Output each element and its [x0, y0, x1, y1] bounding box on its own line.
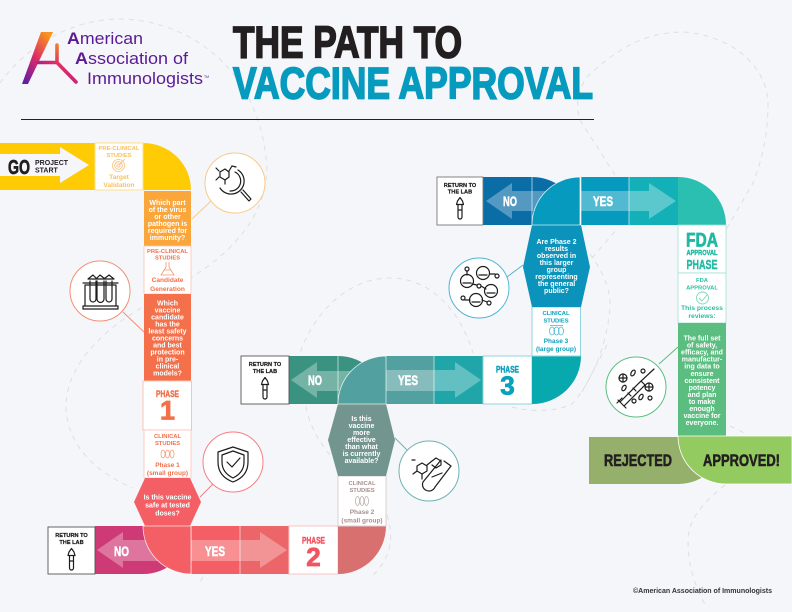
- panel: phase 2: PHASE: [302, 536, 325, 546]
- hexagon: general public question: the general: [538, 281, 575, 288]
- panel: candidate generation: STUDIES: [155, 256, 180, 262]
- panel: candidate generation: PRE-CLINICAL: [147, 249, 188, 255]
- hexagon: effective question: effective: [347, 437, 376, 444]
- panel: clinical phase 1: CLINICAL: [154, 434, 181, 440]
- icon: vial: [68, 548, 75, 570]
- arrow: no 1: [97, 532, 170, 568]
- panel: fda approval phase: [678, 225, 726, 273]
- arrow: yes 3: [581, 183, 676, 219]
- target validation box: STUDIES: [106, 153, 132, 159]
- hexagon: general public question: this larger: [540, 260, 574, 267]
- curve: corner 3: [338, 356, 386, 404]
- return to lab 1: THE LAB: [59, 540, 84, 546]
- curve: corner 4: [532, 356, 581, 404]
- panel: pathogen question: or other: [154, 214, 181, 221]
- panel: safety question: vaccine: [155, 308, 180, 314]
- panel: safety question: protection: [150, 350, 185, 356]
- target validation box: [95, 143, 143, 190]
- panel: rejected: REJECTED: [604, 451, 672, 470]
- panel: pathogen question: of the virus: [149, 207, 186, 214]
- icon: vial: [262, 378, 268, 399]
- panel: fda approval review: reviews:: [688, 313, 716, 320]
- no label: NO: [308, 373, 322, 388]
- icon: vial: [456, 198, 464, 219]
- panel: review details: of safety,: [687, 342, 717, 350]
- title line 1: THE PATH TO: [233, 18, 462, 68]
- panel: phase 1: 1: [160, 396, 175, 426]
- icon circle: shield: [203, 432, 263, 492]
- panel: fda approval review: [678, 273, 726, 323]
- panel: phase 1: [143, 381, 192, 430]
- hexagon: effective question: Is this: [351, 416, 372, 423]
- panel: pathogen question: [144, 191, 191, 246]
- return to lab 2: RETURN TO: [249, 362, 282, 368]
- panel: clinical phase 1: [144, 430, 191, 478]
- yes label: YES: [593, 194, 613, 209]
- panel: review details: efficacy, and: [681, 350, 723, 357]
- return to lab 3: RETURN TO: [444, 183, 477, 189]
- hexagon: general public question: observed in: [537, 253, 576, 260]
- hexagon: effective question: [328, 404, 395, 476]
- curve: corner 1: [143, 526, 191, 574]
- panel: safety question: models?: [153, 370, 182, 378]
- curve: fda corner: [678, 177, 726, 225]
- panel: clinical phase 2: [338, 476, 386, 526]
- panel: band 3 no: [483, 177, 580, 225]
- panel: candidate generation: Candidate: [152, 277, 184, 284]
- go label: GO: [8, 157, 30, 179]
- panel: safety question: has the: [155, 322, 180, 328]
- panel: safety question: clinical: [156, 364, 179, 370]
- panel: safety question: least safety: [148, 328, 187, 336]
- panel: clinical phase 1: Phase 1: [155, 462, 180, 469]
- panel: review details: consistent: [684, 378, 720, 385]
- icon circle: magnifier: [205, 153, 265, 213]
- panel: pathogen question: pathogen is: [148, 221, 187, 228]
- hexagon: general public question: representing: [535, 274, 578, 281]
- go arrow: [0, 147, 89, 183]
- panel: approved: [678, 436, 792, 484]
- panel: go band: [0, 143, 191, 190]
- panel: phase 3: 3: [500, 370, 515, 400]
- logo: [22, 30, 209, 88]
- icon circle: test tube rack: [70, 261, 130, 321]
- panel: pathogen question: Which part: [149, 200, 186, 207]
- panel: clinical phase 3: [532, 307, 580, 356]
- logo text: Association of: [75, 50, 188, 68]
- title: [233, 18, 593, 108]
- panel: fda approval review: FDA: [696, 278, 709, 284]
- panel: safety question: Which: [157, 300, 178, 308]
- no label: NO: [503, 194, 517, 209]
- panel: fda approval phase: APPROVAL: [686, 248, 718, 257]
- hexagon: general public question: Are Phase 2: [536, 239, 577, 246]
- hexagon: safe question: Is this vaccine: [144, 494, 192, 502]
- panel: band 1 no: [95, 526, 191, 574]
- panel: fda approval review: APPROVAL: [686, 286, 718, 292]
- panel: review details: [678, 323, 726, 436]
- panel: pathogen question: required for: [148, 228, 187, 235]
- logo text: [67, 30, 209, 88]
- arrow: yes 1: [191, 532, 287, 568]
- panel: phase 1: PHASE: [156, 389, 179, 399]
- panel: safety question: and best: [153, 342, 183, 350]
- hexagon: general public question: public?: [544, 288, 569, 295]
- panel: review details: to make: [689, 399, 715, 406]
- hexagon: effective question: more: [353, 430, 370, 437]
- icon: check badge: [696, 292, 708, 304]
- return to lab 2: [241, 356, 289, 404]
- panel: fda approval review: This process: [681, 305, 723, 312]
- panel: band 2 yes: [386, 356, 483, 404]
- panel: review details: The full set: [684, 336, 721, 342]
- return to lab 1: RETURN TO: [55, 533, 88, 539]
- icon circle: connected people: [449, 258, 509, 318]
- target validation box: PRE-CLINICAL: [99, 146, 140, 152]
- panel: clinical phase 2: CLINICAL: [348, 481, 376, 487]
- icon circle: molecule and test tube: [399, 441, 459, 501]
- curve: corner 5: [532, 177, 580, 225]
- yes label: YES: [398, 373, 418, 388]
- panel: review details: potency: [689, 385, 716, 392]
- project start: PROJECT: [35, 160, 69, 167]
- panel: pathogen question: immunity?: [150, 235, 185, 242]
- hexagon: effective question: vaccine: [349, 423, 374, 430]
- panel: safety question: [144, 294, 191, 381]
- panel: clinical phase 1: (small group): [147, 470, 188, 477]
- hexagon: safe question: safe at tested: [145, 502, 190, 510]
- yes label: YES: [205, 544, 225, 559]
- icon: target: [112, 159, 125, 172]
- no label: NO: [114, 544, 129, 559]
- panel: band 2 no: [289, 356, 386, 404]
- title line 2: VACCINE APPROVAL: [233, 60, 593, 108]
- logo text: Immunologists: [87, 70, 203, 88]
- target validation box: Target: [109, 174, 130, 181]
- arrow: no 3: [486, 183, 560, 219]
- panel: phase 2: [289, 526, 338, 574]
- hexagon: safe question: [134, 478, 201, 526]
- hexagon: general public question: group: [547, 267, 566, 274]
- panel: clinical phase 3: (large group): [536, 346, 576, 353]
- icon: people: [161, 450, 174, 458]
- copyright: ©American Association of Immunologists: [633, 587, 772, 595]
- panel: clinical phase 2: (small group): [341, 518, 383, 524]
- icon: people: [356, 496, 368, 506]
- panel: safety question: in pre-: [157, 356, 179, 364]
- panel: fda approval phase: FDA: [686, 230, 718, 252]
- project start: START: [35, 168, 59, 174]
- panel: clinical phase 3: Phase 3: [544, 338, 569, 345]
- hexagon: general public question: [523, 225, 590, 307]
- connector lines: [123, 201, 678, 497]
- hexagon: effective question: available?: [345, 458, 378, 465]
- panel: clinical phase 3: CLINICAL: [542, 311, 570, 317]
- panel: clinical phase 1: STUDIES: [155, 441, 180, 447]
- arrow: no 2: [291, 362, 365, 398]
- panel: safety question: candidate: [151, 314, 184, 322]
- hexagon: effective question: is currently: [343, 451, 380, 458]
- panel: phase 2: 2: [306, 542, 321, 572]
- arrow: yes 2: [386, 362, 481, 398]
- panel: review details: enough: [689, 406, 715, 413]
- panel: review details: manufactur-: [682, 357, 723, 364]
- panel: safety question: concerns: [152, 336, 183, 342]
- hexagon: safe question: doses?: [155, 510, 180, 518]
- panel: band 1 yes: [191, 526, 289, 574]
- return to lab 1: [48, 527, 95, 574]
- panel: rejected: [589, 437, 726, 484]
- hexagon: general public question: results: [545, 246, 568, 253]
- panel: review details: ensure: [691, 371, 714, 378]
- panel: review details: ing data to: [684, 364, 720, 371]
- hexagon: effective question: than what: [345, 444, 378, 451]
- return to lab 2: THE LAB: [253, 369, 277, 375]
- icon: flask: [161, 262, 174, 275]
- target validation box: Validation: [103, 182, 135, 189]
- curve: corner 2: [338, 526, 386, 574]
- panel: band 3 yes: [581, 177, 678, 225]
- panel: clinical phase 3: STUDIES: [543, 318, 569, 324]
- logo text: American: [67, 30, 143, 48]
- return to lab 3: [437, 177, 483, 225]
- panel: review details: vaccine for: [684, 413, 721, 420]
- icon: people: [550, 326, 564, 335]
- logo mark: [22, 32, 76, 84]
- panel: review details: everyone.: [686, 420, 718, 427]
- icon circle: syringe and viruses: [606, 357, 666, 417]
- panel: clinical phase 2: STUDIES: [349, 488, 375, 494]
- panel: phase 3: PHASE: [496, 364, 519, 374]
- panel: phase 3: [483, 356, 532, 404]
- return to lab 3: THE LAB: [448, 190, 472, 196]
- panel: review details: and plan: [688, 392, 716, 399]
- panel: candidate generation: Generation: [150, 286, 185, 293]
- panel: fda approval phase: PHASE: [686, 258, 718, 272]
- panel: candidate generation: [144, 246, 191, 294]
- panel: clinical phase 2: Phase 2: [350, 509, 375, 516]
- logo text: TM: [204, 75, 209, 79]
